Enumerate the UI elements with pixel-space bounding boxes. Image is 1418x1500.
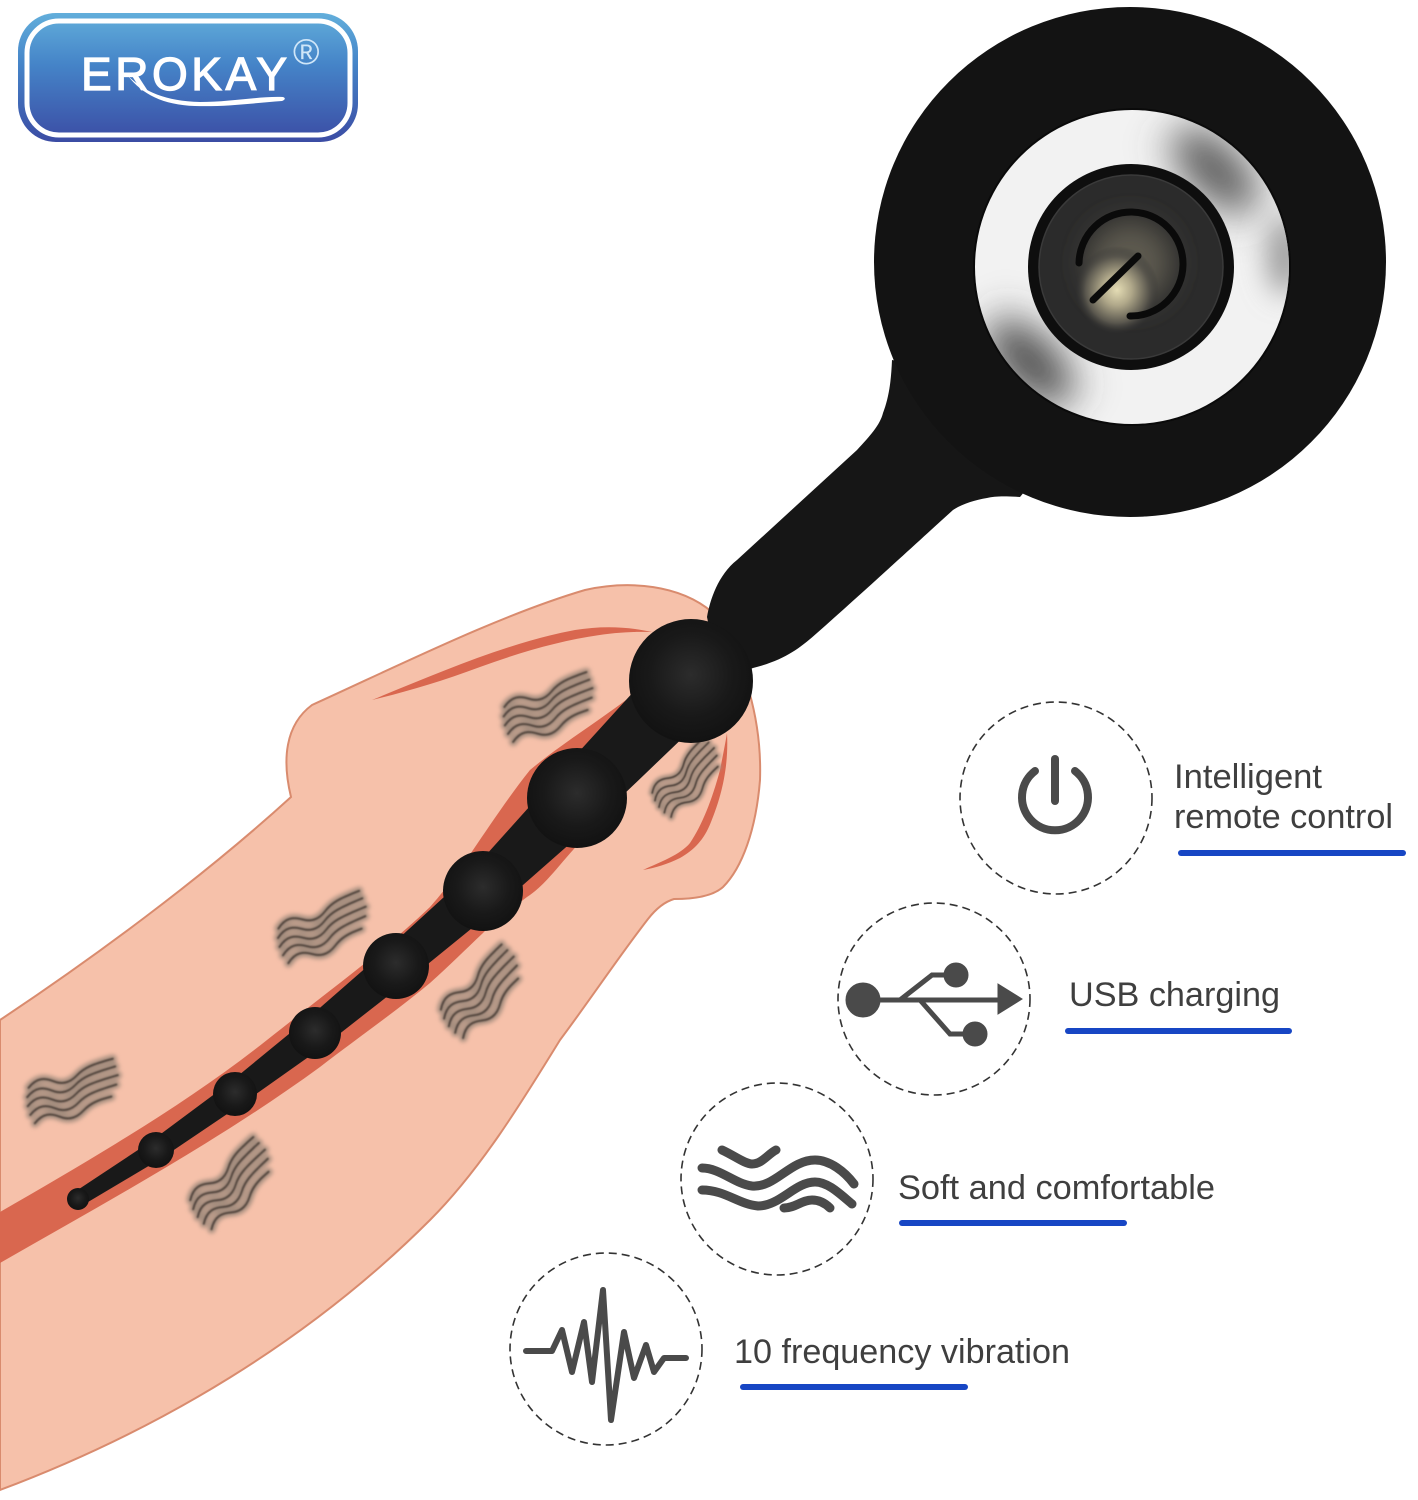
feature: USB charging	[838, 903, 1292, 1095]
logo badge: ®	[293, 31, 320, 72]
feature: intelligent remote control	[960, 702, 1406, 894]
logo badge	[18, 13, 358, 142]
feature: intelligent remote control: Intelligent	[1174, 758, 1323, 796]
vibration marks	[22, 672, 732, 1233]
icon: waves	[702, 1150, 854, 1208]
feature: USB charging: USB charging	[1069, 976, 1280, 1014]
feature: soft and comfortable: Soft and comfortable	[898, 1169, 1215, 1207]
feature: 10 frequency vibration: 10 frequency vibration	[734, 1333, 1070, 1371]
icon: usb	[846, 963, 1022, 1046]
anatomical diagram	[0, 585, 760, 1490]
inner channel	[0, 697, 640, 1263]
logo badge: EROKAY	[81, 48, 287, 100]
device: silver ring	[973, 108, 1303, 426]
device: beaded probe	[67, 619, 753, 1210]
device: handle	[707, 360, 1100, 680]
feature: 10 frequency vibration	[510, 1253, 1070, 1445]
fold line right	[643, 733, 727, 870]
icon: power	[1022, 759, 1088, 830]
feature: intelligent remote control: remote control	[1174, 798, 1393, 836]
fold line upper	[372, 627, 652, 700]
device: head	[874, 7, 1386, 517]
icon: waveform	[526, 1290, 686, 1420]
feature: soft and comfortable	[681, 1083, 1215, 1275]
device: power button	[1028, 164, 1234, 370]
